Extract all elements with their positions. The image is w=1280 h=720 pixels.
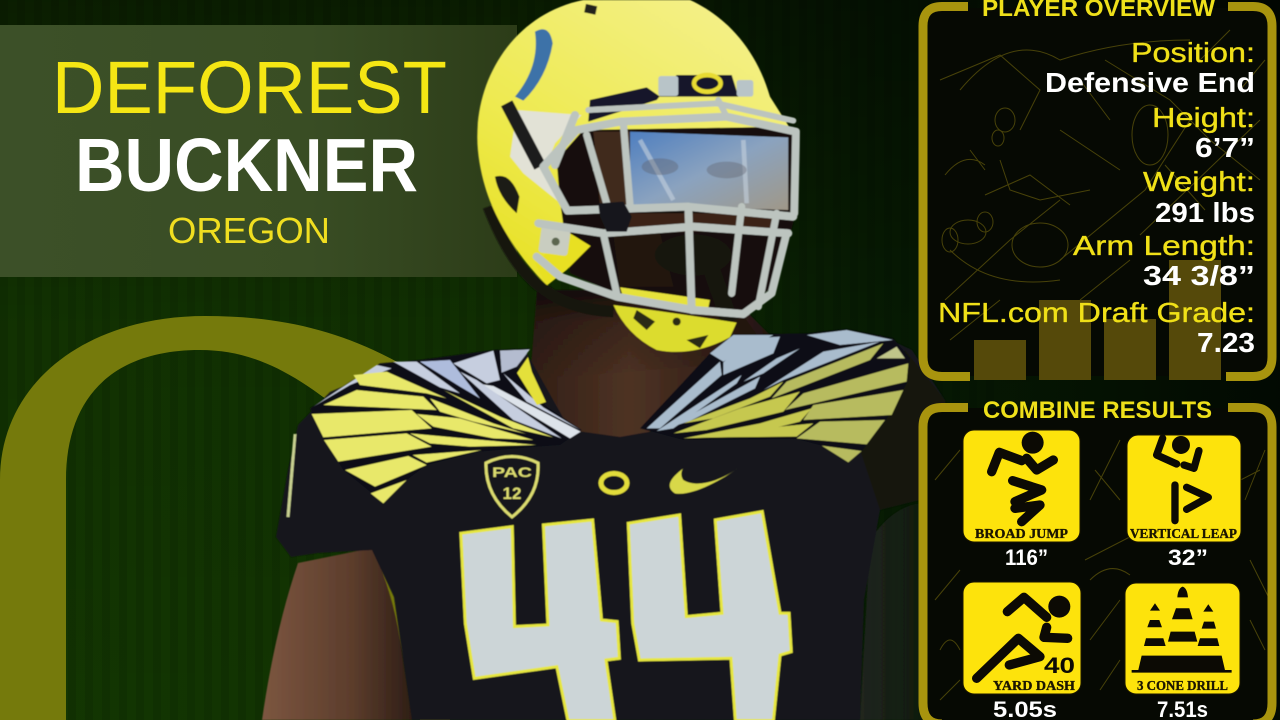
ear hole xyxy=(495,176,519,213)
PAC-12 shield: 12 xyxy=(503,484,521,503)
value: vertical leap: 32” xyxy=(1168,545,1208,570)
stat: arm length: 34 3/8” xyxy=(1143,260,1255,291)
combine results background xyxy=(924,408,1271,720)
stat: position xyxy=(1045,37,1255,98)
panel border xyxy=(923,408,1272,720)
face cavity xyxy=(557,127,795,315)
mask clip xyxy=(598,202,632,232)
school: OREGON: OREGON xyxy=(168,210,330,251)
faint bars chart xyxy=(974,260,1221,380)
right arm in shadow xyxy=(860,503,965,720)
bumper with O xyxy=(588,75,753,122)
stat: weight: 291 lbs xyxy=(1155,197,1255,228)
left arm xyxy=(262,548,412,720)
black strap xyxy=(507,103,540,167)
icon: 40 yard dash xyxy=(963,582,1081,694)
icon: broad jump xyxy=(963,430,1080,542)
swoosh xyxy=(670,467,740,494)
helmet xyxy=(477,0,796,352)
stat: draft grade xyxy=(938,297,1255,358)
Oregon O logo watermark xyxy=(0,316,450,720)
faint schematic lines xyxy=(935,440,1270,700)
stat: draft grade: NFL.com Draft Grade: xyxy=(938,297,1255,328)
stat: height xyxy=(1152,102,1255,163)
panel border xyxy=(923,6,1272,376)
PAC-12 shield: PAC xyxy=(492,464,532,480)
name banner panel xyxy=(0,25,517,277)
panel: combine results xyxy=(923,397,1272,720)
blue O stripe xyxy=(515,29,553,101)
faint schematic lines xyxy=(940,30,1265,340)
stat: arm length: Arm Length: xyxy=(1073,230,1255,261)
jaw strap xyxy=(488,207,613,312)
stat: draft grade: 7.23 xyxy=(1197,327,1255,358)
neck xyxy=(510,290,775,445)
icon: 40 yard dash: YARD DASH xyxy=(993,678,1076,693)
stat: position: Defensive End xyxy=(1045,67,1255,98)
PAC-12 shield xyxy=(486,456,538,517)
icon: 3 cone drill xyxy=(1125,583,1240,694)
white side panel xyxy=(510,110,582,208)
left shoulder wing xyxy=(310,348,582,503)
sleeve piping xyxy=(288,434,295,517)
player name: BUCKNER: BUCKNER xyxy=(75,123,418,207)
mouthpiece xyxy=(655,234,732,276)
stat: weight: Weight: xyxy=(1143,166,1255,197)
visor xyxy=(630,132,788,210)
chin cup xyxy=(613,305,737,352)
jersey number 44 xyxy=(461,512,791,720)
icon: 40 yard dash: 40 xyxy=(1044,653,1075,678)
player name: DEFOREST: DEFOREST xyxy=(52,46,447,129)
helmet shell xyxy=(477,0,793,285)
skin xyxy=(593,132,630,207)
value: broad jump: 116” xyxy=(1005,545,1048,570)
stat: arm length xyxy=(1073,230,1255,291)
icon: vertical leap: VERTICAL LEAP xyxy=(1130,526,1237,541)
panel: player overview xyxy=(923,0,1272,380)
jersey xyxy=(276,335,955,720)
stat: weight xyxy=(1143,166,1255,228)
top vent xyxy=(584,4,597,15)
player overview background xyxy=(924,8,1271,376)
right shoulder wing xyxy=(640,329,910,462)
player photo illustration xyxy=(262,0,965,720)
collar trim xyxy=(517,357,546,405)
stat: position: Position: xyxy=(1131,37,1255,68)
facemask xyxy=(537,100,796,314)
heading: combine results: COMBINE RESULTS xyxy=(983,397,1212,424)
jaw side piece xyxy=(535,233,591,285)
chest O logo xyxy=(601,474,627,492)
icon: vertical leap xyxy=(1127,435,1241,542)
icon: broad jump: BROAD JUMP xyxy=(975,526,1068,541)
icon: 3 cone drill: 3 CONE DRILL xyxy=(1137,678,1228,693)
stat: height: 6’7” xyxy=(1195,132,1255,163)
stat: height: Height: xyxy=(1152,102,1255,133)
